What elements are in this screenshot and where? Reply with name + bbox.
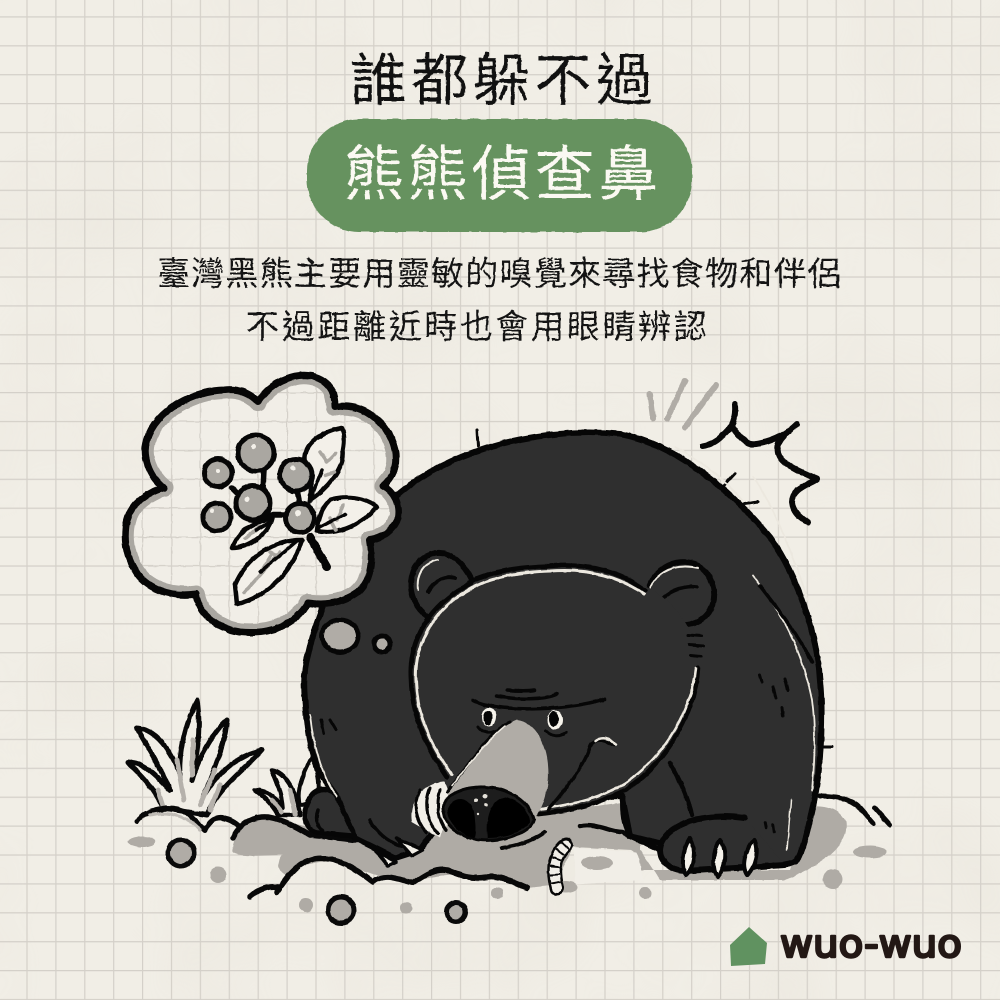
- leaf veins: [244, 452, 343, 593]
- left claws: [376, 838, 423, 866]
- white fur tuft: [411, 782, 452, 838]
- bear body: [304, 433, 822, 866]
- thought dots: [322, 620, 390, 652]
- brow lines: [473, 690, 605, 709]
- bear head: [411, 565, 703, 815]
- worm: [555, 845, 566, 888]
- hairs: [477, 430, 832, 747]
- muzzle: [443, 720, 548, 840]
- leaves: [232, 428, 377, 604]
- logo house icon: [730, 927, 767, 966]
- green title pill: [307, 119, 692, 232]
- hind paw: [305, 789, 355, 836]
- ground smudges: [128, 836, 887, 914]
- ground outlines: [233, 796, 890, 897]
- stems: [232, 470, 300, 515]
- grass left: [128, 700, 262, 830]
- nose highlights: [474, 794, 488, 815]
- eyes: [478, 708, 566, 736]
- right arm and paw: [623, 763, 791, 871]
- fur dashes: [321, 675, 788, 733]
- squiggle marks: [703, 404, 817, 522]
- back stripe highlights: [310, 447, 815, 797]
- logo: [730, 922, 962, 966]
- pebbles: [168, 840, 466, 923]
- hind paw toes: [317, 810, 408, 848]
- illustration: bear scene: [125, 375, 890, 923]
- smile: [548, 740, 614, 810]
- logo wordmark: wuo-wuo: [780, 922, 962, 966]
- neck ticks: [688, 635, 703, 656]
- nostrils: [447, 799, 476, 838]
- paper patch in ground: [574, 848, 644, 884]
- motion marks: [650, 381, 716, 427]
- nose: [443, 787, 534, 840]
- berry highlights: [210, 444, 301, 516]
- thought bubble: [125, 375, 398, 633]
- berries: [203, 435, 314, 532]
- gray ground: [128, 800, 887, 914]
- pill heading text: 熊熊偵查鼻: [344, 141, 662, 208]
- right claws: [683, 838, 757, 877]
- title: 誰都躲不過: [350, 49, 658, 113]
- description line 2: 不過距離近時也會用眼睛辨認: [246, 308, 709, 345]
- description line 1: 臺灣黑熊主要用靈敏的嗅覺來尋找食物和伴侶: [157, 255, 842, 292]
- grass small: [255, 757, 319, 815]
- ears: [411, 553, 714, 640]
